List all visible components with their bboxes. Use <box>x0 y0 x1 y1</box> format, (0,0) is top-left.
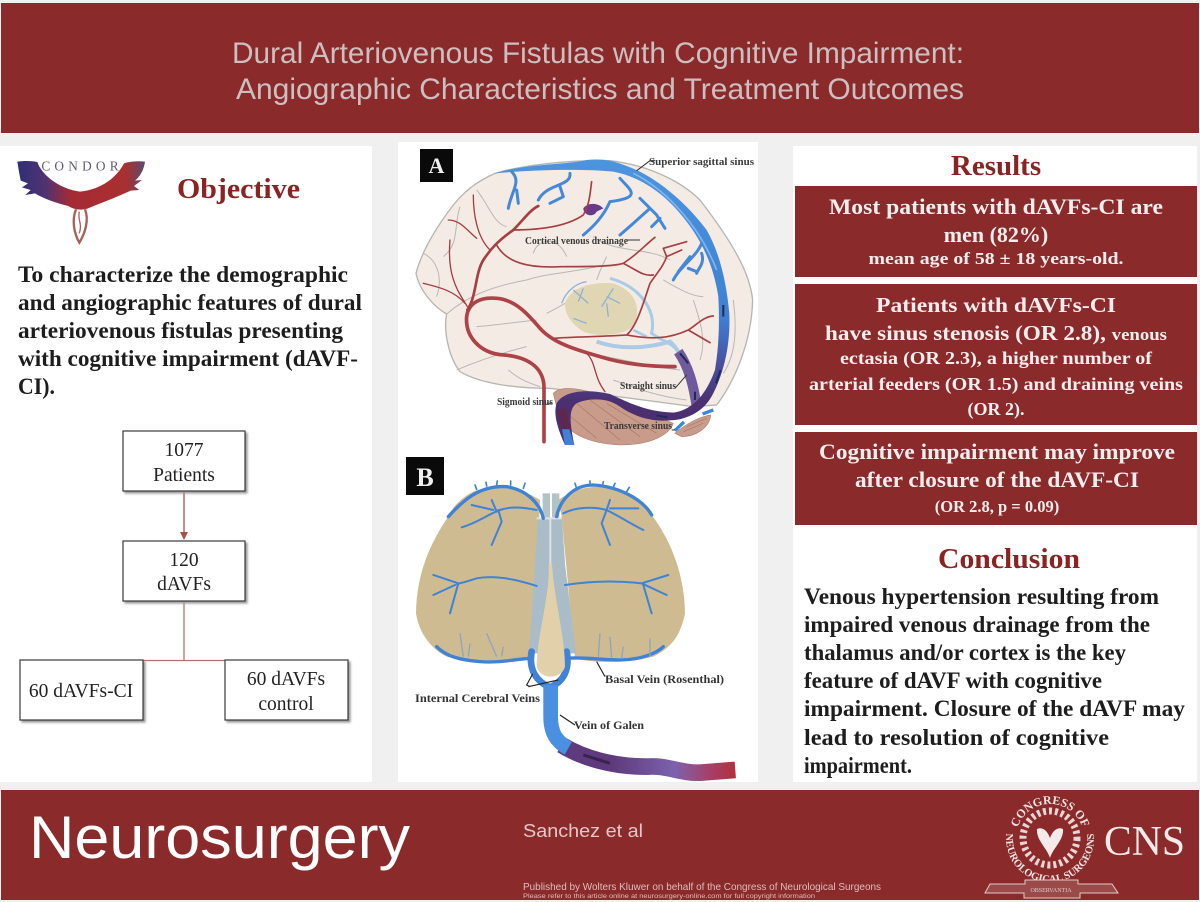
panel: results and conclusion <box>793 146 1197 782</box>
panel: anatomy illustrations <box>398 142 758 782</box>
publisher note: Published by Wolters Kluwer on behalf of the Congress of Neurological Surgeons <box>523 881 881 893</box>
fistula nidus <box>583 204 603 215</box>
flow chart: 1077 <box>164 440 204 461</box>
labels: brain A: Transverse sinus <box>604 421 672 432</box>
conclusion text: Venous hypertension resulting from <box>804 584 1159 609</box>
title banner <box>1 3 1199 133</box>
result box 1: mean age of 58 ± 18 years-old. <box>868 249 1124 268</box>
labels: brain A: Superior sagittal sinus <box>649 157 754 168</box>
result box 3 <box>795 432 1197 525</box>
illustration B: brain coronal <box>416 481 735 773</box>
icon: CNS seal: OBSERVANTIA <box>1030 888 1072 894</box>
result box 1: men (82%) <box>944 222 1048 247</box>
flow chart: 60 dAVFs <box>247 669 325 690</box>
result box 2: arterial feeders (OR 1.5) and draining veins <box>809 374 1183 395</box>
result box 3: Cognitive impairment may improve <box>819 439 1175 464</box>
straight sinus <box>678 352 697 407</box>
result box 3: (OR 2.8, p = 0.09) <box>935 497 1059 516</box>
footer banner <box>1 790 1199 900</box>
heading: results: Results <box>951 150 1041 182</box>
conclusion text <box>804 584 1185 778</box>
panel: objective <box>0 146 372 782</box>
result box 2: have sinus stenosis (OR 2.8), venous <box>825 321 1167 345</box>
labels: brain B: Basal Vein (Rosenthal) <box>605 672 724 686</box>
result box 2: ectasia (OR 2.3), a higher number of <box>840 348 1153 369</box>
arteries <box>423 182 713 442</box>
label: A <box>420 149 453 182</box>
journal name: Neurosurgery <box>29 804 410 871</box>
labels: brain A <box>497 157 754 432</box>
central grey-blue strips <box>529 518 576 653</box>
labels: brain B: Internal Cerebral Veins <box>415 691 540 705</box>
icon: Condor logo: CONDOR <box>41 159 119 174</box>
CNS wordmark: CNS <box>1104 819 1185 865</box>
label: B <box>406 457 444 495</box>
flow chart: Patients <box>153 465 215 486</box>
objective text: and angiographic features of dural <box>18 290 362 315</box>
result box 2 <box>795 284 1197 425</box>
result box 3: after closure of the dAVF-CI <box>855 467 1139 492</box>
thalamus <box>565 283 637 335</box>
icon: CNS seal <box>984 796 1119 898</box>
cortical veins <box>508 172 703 280</box>
icon: CNS seal: NEUROLOGICAL SURGEONS <box>1006 834 1094 880</box>
result box 1 <box>795 186 1197 277</box>
vein of Galen <box>562 745 735 773</box>
conclusion text: feature of dAVF with cognitive <box>804 668 1102 693</box>
objective text: CI). <box>18 374 55 399</box>
title: Dural Arteriovenous Fistulas with Cognitive Impairment: <box>232 37 964 70</box>
label: B: B <box>416 463 434 492</box>
labels: brain B <box>415 672 724 732</box>
conclusion text: thalamus and/or cortex is the key <box>804 640 1126 665</box>
callout leader lines <box>547 161 687 430</box>
callout leader lines <box>527 662 605 725</box>
central wedge <box>537 563 565 677</box>
result box 2: Patients with dAVFs-CI <box>876 293 1116 317</box>
heading: conclusion: Conclusion <box>938 543 1080 575</box>
illustration A: brain lateral <box>416 159 753 445</box>
conclusion text: impaired venous drainage from the <box>804 612 1150 637</box>
icon: Condor logo <box>17 159 145 243</box>
objective text: To characterize the demographic <box>18 262 348 287</box>
flow chart: 120 <box>169 550 199 571</box>
cerebellum <box>553 388 673 445</box>
publisher note <box>523 881 881 900</box>
label: A: A <box>429 153 445 178</box>
heading: objective: Objective <box>177 173 300 205</box>
objective text <box>18 262 362 399</box>
result box 2: (OR 2). <box>968 399 1024 420</box>
flow chart: 60 dAVFs-CI <box>29 681 133 702</box>
conclusion text: impairment. Closure of the dAVF may <box>804 696 1185 721</box>
title: Angiographic Characteristics and Treatment Outcomes <box>236 73 964 106</box>
flow chart: dAVFs <box>157 574 211 595</box>
flow chart <box>20 431 348 720</box>
flow chart: control <box>258 694 314 715</box>
labels: brain A: Sigmoid sinus <box>497 397 553 408</box>
publisher note: Please refer to this article online at neurosurgery-online.com for full copyright information <box>523 893 815 900</box>
conclusion text: impairment. <box>804 753 912 778</box>
objective text: with cognitive impairment (dAVF- <box>18 346 358 371</box>
labels: brain A: Straight sinus <box>620 381 676 392</box>
labels: brain A: Cortical venous drainage <box>525 236 629 247</box>
labels: brain B: Vein of Galen <box>574 718 644 732</box>
icon: CNS seal: CONGRESS OF <box>1012 796 1090 826</box>
result box 1: Most patients with dAVFs-CI are <box>829 194 1163 219</box>
author: Sanchez et al <box>523 821 643 841</box>
superior sagittal sinus <box>495 159 729 445</box>
conclusion text: lead to resolution of cognitive <box>804 725 1109 750</box>
objective text: arteriovenous fistulas presenting <box>18 318 344 343</box>
